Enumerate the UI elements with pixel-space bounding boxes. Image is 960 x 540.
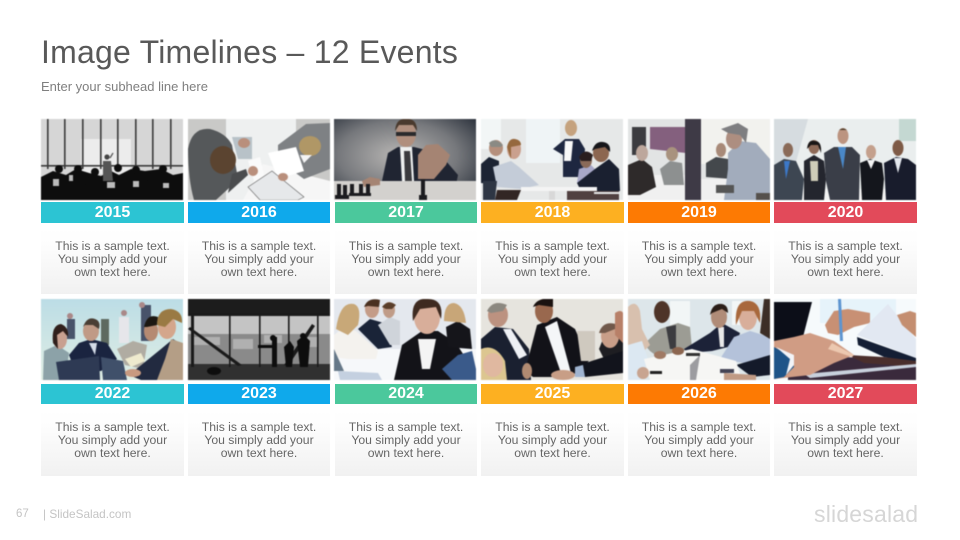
- text block: [628, 228, 770, 294]
- year band: [335, 384, 477, 404]
- year band: 2023: [241, 385, 277, 402]
- year band: [628, 202, 770, 223]
- card: 2022: [40, 298, 184, 476]
- subhead: Enter your subhead line here: [41, 79, 208, 94]
- text block: [188, 228, 330, 294]
- year band: 2020: [828, 204, 863, 221]
- text block: This is a sample text.: [788, 239, 903, 253]
- text block: This is a sample text.: [55, 239, 170, 253]
- text block: This is a sample text.: [495, 420, 610, 434]
- text block: own text here.: [74, 446, 151, 460]
- card: 2027: [773, 298, 917, 476]
- year band: [188, 384, 330, 404]
- text block: own text here.: [807, 446, 884, 460]
- photo: silhouettes at office window with city view: [187, 298, 331, 381]
- year band: 2026: [681, 385, 717, 402]
- text block: [481, 228, 624, 294]
- text block: This is a sample text.: [349, 420, 463, 434]
- text block: You simply add your: [644, 433, 754, 447]
- year band: 2022: [95, 385, 130, 402]
- year band: [188, 202, 330, 223]
- text block: [335, 410, 477, 476]
- photo: presentation at whiteboard: [480, 119, 623, 201]
- text block: This is a sample text.: [55, 420, 170, 434]
- year band: [481, 202, 624, 223]
- text block: You simply add your: [791, 252, 900, 266]
- text block: [628, 410, 770, 476]
- title: Image Timelines – 12 Events: [41, 34, 458, 70]
- card: 2015: [40, 118, 184, 294]
- card: 2018: [480, 119, 624, 294]
- card: 2024: [333, 298, 477, 476]
- year band: 2027: [828, 385, 863, 402]
- text block: [41, 410, 184, 476]
- text block: [481, 410, 624, 476]
- text block: own text here.: [74, 265, 151, 279]
- text block: own text here.: [221, 446, 297, 460]
- text block: You simply add your: [204, 433, 314, 447]
- text block: [188, 410, 330, 476]
- photo: colleagues shaking hands: [480, 298, 624, 381]
- text block: You simply add your: [58, 433, 167, 447]
- photo: team with laptop: [40, 298, 184, 381]
- photo: two people at table from above: [187, 118, 331, 201]
- text block: You simply add your: [58, 252, 167, 266]
- year band: 2025: [535, 385, 570, 402]
- card: 2019: [627, 118, 771, 294]
- text block: own text here.: [661, 446, 737, 460]
- year band: [335, 202, 477, 223]
- photo: silhouettes in front of windows: [40, 118, 184, 201]
- photo: team around documents: [628, 298, 771, 381]
- card: 2020: [773, 118, 917, 294]
- text block: [774, 228, 917, 294]
- text block: You simply add your: [498, 252, 607, 266]
- logo: slidesalad: [814, 501, 918, 527]
- card: 2016: [187, 118, 331, 294]
- photo: meeting behind glass: [627, 118, 771, 201]
- card: 2026: [628, 298, 771, 476]
- year band: [628, 384, 770, 404]
- text block: You simply add your: [791, 433, 900, 447]
- page number: 67: [16, 508, 29, 520]
- year band: 2017: [388, 204, 424, 221]
- text block: own text here.: [514, 265, 591, 279]
- text block: [41, 228, 184, 294]
- text block: You simply add your: [204, 252, 314, 266]
- text block: own text here.: [368, 446, 444, 460]
- card: 2023: [187, 298, 331, 476]
- text block: own text here.: [661, 265, 737, 279]
- text block: This is a sample text.: [642, 420, 756, 434]
- year band: 2019: [681, 204, 717, 221]
- year band: 2015: [95, 204, 130, 221]
- year band: [41, 202, 184, 223]
- card: 2017: [333, 118, 477, 294]
- footer text: | SlideSalad.com: [43, 507, 131, 521]
- year band: [774, 202, 917, 223]
- text block: [335, 228, 477, 294]
- photo: five business people walking: [773, 118, 917, 201]
- photo: businessman playing chess: [333, 118, 477, 201]
- year band: 2016: [241, 204, 277, 221]
- text block: This is a sample text.: [788, 420, 903, 434]
- year band: 2018: [535, 204, 570, 221]
- text block: own text here.: [807, 265, 884, 279]
- year band: [41, 384, 184, 404]
- text block: This is a sample text.: [495, 239, 610, 253]
- year band: 2024: [388, 385, 424, 402]
- text block: own text here.: [514, 446, 591, 460]
- year band: [481, 384, 624, 404]
- text block: This is a sample text.: [202, 420, 316, 434]
- text block: You simply add your: [644, 252, 754, 266]
- text block: You simply add your: [498, 433, 607, 447]
- photo: hands with pen and document: [773, 298, 917, 381]
- year band: [774, 384, 917, 404]
- text block: This is a sample text.: [349, 239, 463, 253]
- text block: You simply add your: [351, 433, 461, 447]
- card: 2025: [480, 298, 624, 476]
- text block: This is a sample text.: [202, 239, 316, 253]
- text block: You simply add your: [351, 252, 461, 266]
- text block: own text here.: [368, 265, 444, 279]
- photo: smiling businesswoman at meeting: [333, 298, 477, 381]
- text block: own text here.: [221, 265, 297, 279]
- text block: This is a sample text.: [642, 239, 756, 253]
- text block: [774, 410, 917, 476]
